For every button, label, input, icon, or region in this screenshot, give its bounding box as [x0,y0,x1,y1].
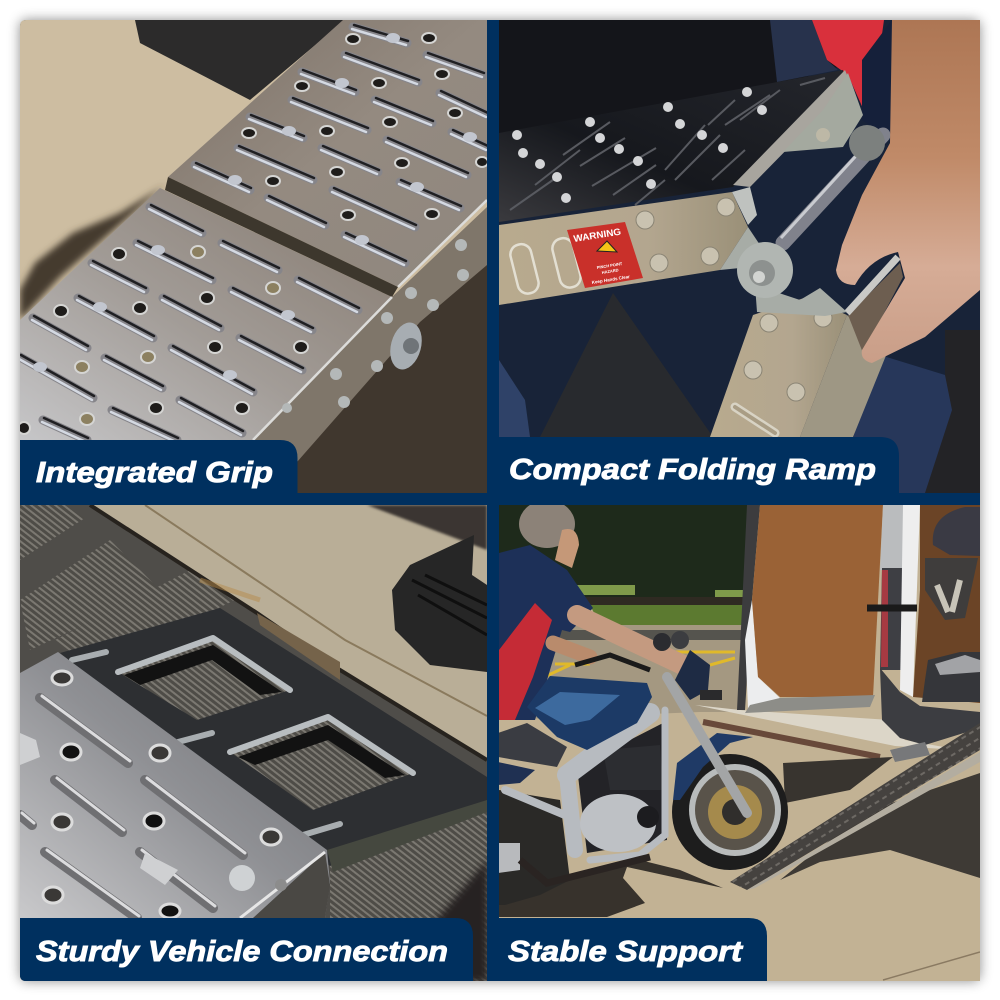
lower ramp deck [20,188,392,440]
label: sturdy vehicle connection [20,918,473,981]
man's torso [499,545,593,720]
warning sticker [567,222,643,288]
panel: compact folding ramp photo [499,20,980,493]
parking area [499,625,745,720]
panel: stable support photo [498,500,980,981]
horizontal divider [20,493,980,505]
deck studs [512,87,767,203]
bracket ridges [72,652,340,835]
folding ramp [730,723,980,890]
lower leg shiny underside [800,315,887,437]
plate bumps [20,733,178,885]
warning sticker: PINCH POINT [596,261,623,270]
far arm [553,643,590,657]
handlebars and gauges [575,631,722,700]
frame [505,710,665,860]
ground shadow right of ramp [780,773,980,880]
upper hinge bracket [783,73,863,152]
gloves [925,558,978,620]
mudguard [673,733,753,800]
black mounting bracket [60,608,487,866]
label: compact folding ramp: Compact Folding Ramp [509,454,876,486]
navy torso right [862,32,882,113]
fuel tank [527,676,652,750]
rear bike mass [499,790,570,905]
label: sturdy vehicle connection: Sturdy Vehicle Connection [36,936,448,968]
engine casing [580,794,656,852]
front wheel [672,754,788,870]
raised bumps [33,33,477,380]
steel handle bar [783,135,883,243]
ramp dark deck [499,70,845,222]
upper ramp deck [168,20,487,287]
leg rivets [744,309,832,401]
ribbed rubber floor [20,505,234,650]
silver end plate [20,652,330,918]
bracket window 2 [230,717,413,810]
exhaust [498,843,520,873]
dark engine bay [577,723,667,853]
head [519,500,575,548]
yellow road markings [542,652,735,678]
van rear body [867,505,980,745]
bracket window 1 [118,638,290,720]
navy sleeve [770,20,838,82]
label: integrated grip: Integrated Grip [36,457,273,489]
red shirt panel [499,603,552,720]
side rivets and pivot bolt [282,239,469,413]
label: compact folding ramp [487,437,899,493]
deck slot marks [510,78,825,210]
dark corner [367,505,487,550]
label: stable support [487,918,767,981]
vertical divider [487,20,499,981]
silver deck edge [733,70,851,187]
tan side wall [499,192,748,305]
mulch strip [560,597,750,606]
engine fins [603,745,663,790]
warning sticker: WARNING [573,227,622,245]
ground shadow left of ramp [783,757,893,803]
warning sticker: Keep Hands Clear [591,274,630,285]
label: stable support: Stable Support [508,936,744,968]
plate bolt [229,865,255,891]
leg slot [735,407,775,433]
label: integrated grip [20,440,298,493]
lawn [590,605,745,626]
hinge plates [720,227,847,316]
side wall slots [508,236,583,296]
drain strip [703,722,880,757]
pivot washer and nut [737,242,793,298]
ramp cast shadow [20,185,165,320]
plate slots [20,696,245,918]
hedge background [499,505,749,598]
hand and arm [836,20,980,363]
van door [737,505,883,713]
step [890,742,930,762]
fork [667,677,747,813]
red shirt panel [812,20,884,113]
ramp side wall [253,207,487,462]
panel: sturdy vehicle connection photo [20,505,487,981]
warning sticker: HAZARD [601,267,619,275]
deck joint [165,177,398,297]
lower right rubber [330,805,487,981]
near arm [577,615,683,665]
floor behind legs [540,293,713,437]
rivets [636,198,735,272]
asphalt ground [298,265,487,493]
lower leg side [710,297,847,437]
plate holes [43,671,281,918]
bag [922,652,980,702]
slots on deck [19,25,488,442]
rubber mat [135,20,345,100]
seat [498,723,567,767]
wooden floor edge [90,505,487,760]
dark shirt [499,20,860,135]
coiled strap [392,535,487,672]
pale pavement [695,705,960,750]
punched holes [18,33,488,434]
helmet [933,507,980,556]
bike cast shadow [499,860,723,917]
ground crack [883,952,980,980]
panel: integrated grip photo [18,20,488,493]
